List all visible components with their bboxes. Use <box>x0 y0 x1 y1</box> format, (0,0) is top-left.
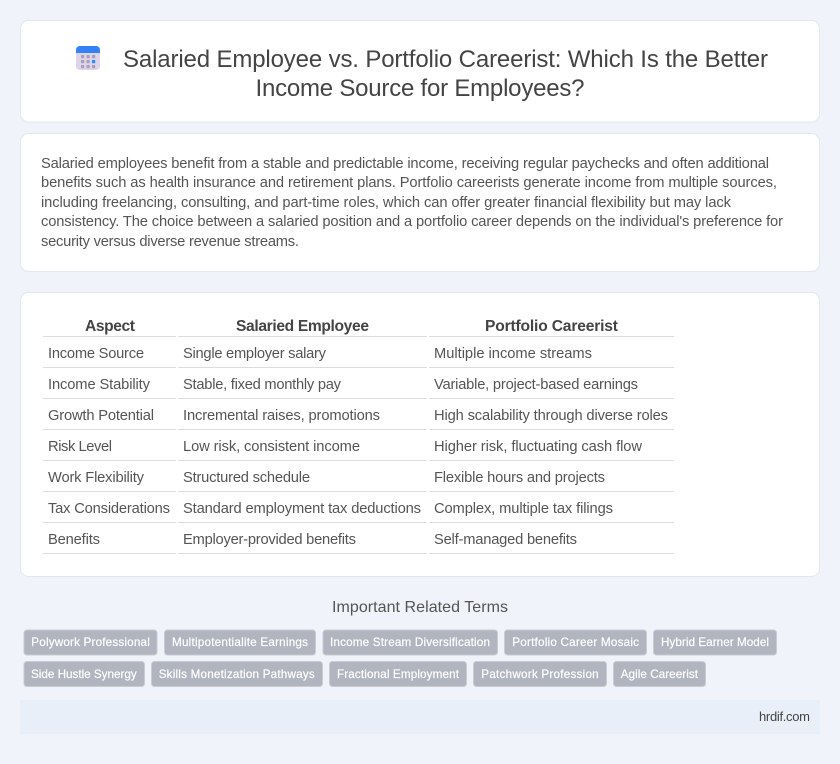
row: Risk Level: Low risk, consistent income <box>183 439 360 455</box>
tag: Skills Monetization Pathways: Skills Monetization Pathways <box>159 668 315 681</box>
heading: important related terms: Important Related Terms <box>332 599 508 616</box>
panel: title header <box>20 20 820 122</box>
table header row: Portfolio Careerist <box>485 318 618 335</box>
table header row <box>43 318 674 336</box>
text block: summary paragraph: security versus diverse revenue streams. <box>41 234 299 250</box>
row: Risk Level: Risk Level <box>48 439 112 455</box>
footer <box>20 700 820 734</box>
tag: Income Stream Diversification <box>323 630 498 655</box>
tag: Patchwork Profession <box>474 662 606 686</box>
tag: Skills Monetization Pathways <box>152 662 322 686</box>
row: Income Stability <box>43 377 674 398</box>
tag: Fractional Employment: Fractional Employment <box>337 668 460 681</box>
row: Income Stability: Income Stability <box>48 377 151 393</box>
row: Work Flexibility: Structured schedule <box>183 470 310 486</box>
row: Risk Level: Higher risk, fluctuating cash flow <box>434 439 642 455</box>
row: Benefits: Benefits <box>48 532 100 548</box>
tag: Portfolio Career Mosaic: Portfolio Career Mosaic <box>512 636 639 649</box>
tag: Portfolio Career Mosaic <box>504 630 646 655</box>
row: Income Source: Multiple income streams <box>434 346 592 362</box>
text block: summary paragraph: including freelancing, consulting, and part-time roles, which can offer greater financial flexibility but may lack <box>41 195 732 211</box>
row: Income Source <box>43 346 674 368</box>
title: Salaried Employee vs. Portfolio Careerist: Which Is the Better <box>123 46 768 73</box>
row: Work Flexibility <box>43 470 674 492</box>
tag: Side Hustle Synergy: Side Hustle Synergy <box>31 668 137 681</box>
text block: summary paragraph: benefits such as health insurance and retirement plans. Portfolio careerists generate income from multiple sources, <box>41 175 777 191</box>
row: Growth Potential: Incremental raises, promotions <box>183 408 380 424</box>
table header row: Salaried Employee <box>236 318 369 335</box>
row: Income Source: Single employer salary <box>183 346 327 362</box>
tag: Fractional Employment <box>330 662 466 686</box>
tag: Agile Careerist <box>614 662 706 686</box>
tag: Agile Careerist: Agile Careerist <box>621 668 699 681</box>
tag: Multipotentialite Earnings <box>164 630 316 655</box>
tag: Polywork Professional <box>24 630 157 655</box>
text block: summary paragraph: Salaried employees benefit from a stable and predictable income, receiving regular paychecks and often additional <box>41 156 769 172</box>
row: Tax Considerations: Complex, multiple tax filings <box>434 501 613 517</box>
text block: summary paragraph: consistency. The choice between a salaried position and a portfolio career depends on the individual's preference for <box>41 214 783 230</box>
table header row: Aspect <box>85 318 135 335</box>
row: Tax Considerations: Standard employment tax deductions <box>183 501 421 517</box>
panel: introduction <box>20 134 820 272</box>
tag: Patchwork Profession: Patchwork Profession <box>481 668 599 681</box>
row: Work Flexibility: Work Flexibility <box>48 470 145 486</box>
row: Growth Potential <box>43 408 674 430</box>
row: Income Stability: Variable, project-based earnings <box>434 377 638 393</box>
icon: calendar <box>76 46 100 70</box>
panel: comparison table <box>20 292 820 576</box>
tag: Side Hustle Synergy <box>24 662 144 686</box>
row: Income Stability: Stable, fixed monthly pay <box>183 377 342 393</box>
tag: Hybrid Earner Model: Hybrid Earner Model <box>661 636 769 649</box>
text block: summary paragraph <box>41 156 783 250</box>
row: Growth Potential: High scalability through diverse roles <box>434 408 668 424</box>
row: Benefits <box>43 532 674 554</box>
row: Risk Level <box>43 439 674 460</box>
title <box>123 46 768 102</box>
footer: hrdif.com <box>759 709 810 724</box>
tag: Income Stream Diversification: Income Stream Diversification <box>330 636 490 649</box>
panel: related term tags <box>24 630 776 686</box>
row: Work Flexibility: Flexible hours and projects <box>434 470 605 486</box>
tag: Multipotentialite Earnings: Multipotentialite Earnings <box>172 636 308 649</box>
row: Income Source: Income Source <box>48 346 144 362</box>
row: Tax Considerations: Tax Considerations <box>48 501 170 517</box>
row: Benefits: Employer-provided benefits <box>183 532 356 548</box>
tag: Hybrid Earner Model <box>654 630 776 655</box>
row: Tax Considerations <box>43 501 674 522</box>
row: Benefits: Self-managed benefits <box>434 532 577 548</box>
title: Income Source for Employees? <box>256 75 584 102</box>
row: Growth Potential: Growth Potential <box>48 408 154 424</box>
tag: Polywork Professional: Polywork Professional <box>31 636 150 649</box>
